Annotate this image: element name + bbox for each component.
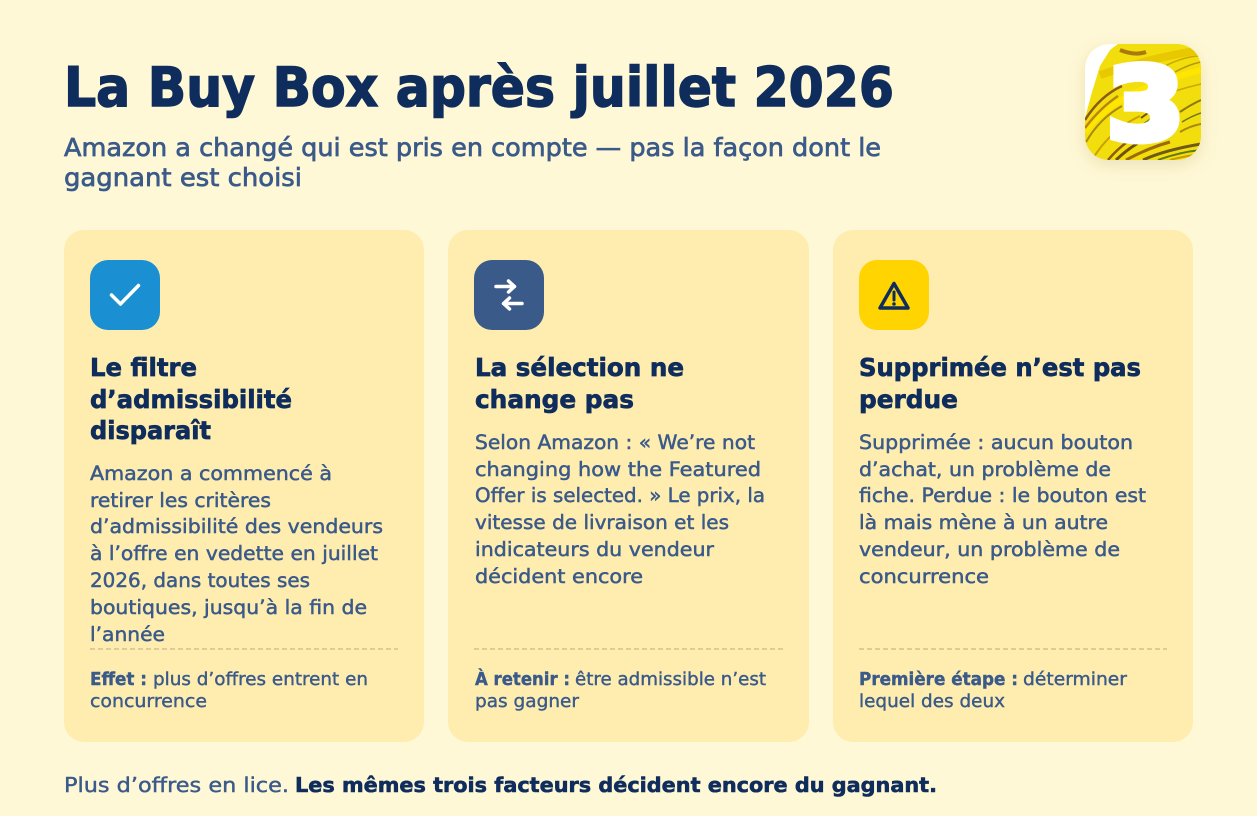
- body text: concurrence: [859, 565, 989, 588]
- footnote: lequel des deux: [859, 692, 1005, 712]
- body text: vendeur, un problème de: [859, 538, 1120, 561]
- body text: à l’offre en vedette en juillet: [90, 542, 378, 565]
- heading: [475, 353, 684, 414]
- body text: décident encore: [475, 565, 643, 588]
- body text: [90, 462, 383, 646]
- logo: yellow brush tile with white 3: [1085, 44, 1201, 163]
- heading: change pas: [475, 385, 634, 414]
- heading: [859, 353, 1141, 414]
- body text: d’achat, un problème de: [859, 458, 1111, 481]
- body text: l’année: [90, 623, 165, 646]
- footnote: À retenir :: [475, 668, 570, 690]
- subtitle: gagnant est choisi: [64, 163, 302, 192]
- icon: warning: [859, 260, 929, 330]
- icon: check: [90, 260, 160, 330]
- heading: Supprimée n’est pas: [859, 353, 1141, 382]
- body text: Selon Amazon : « We’re not: [475, 431, 755, 454]
- body text: [859, 431, 1146, 588]
- closing statement: Les mêmes trois facteurs décident encore du gagnant.: [295, 773, 937, 797]
- heading: [90, 353, 292, 445]
- panel: sélection: [448, 230, 809, 742]
- body text: Offer is selected. » Le prix, la: [475, 484, 765, 507]
- body text: vitesse de livraison et les: [475, 511, 729, 534]
- heading: d’admissibilité: [90, 385, 292, 414]
- body text: boutiques, jusqu’à la fin de: [90, 596, 367, 619]
- title: La Buy Box après juillet 2026: [64, 56, 894, 119]
- panel: filtre d'admissibilité: [64, 230, 424, 742]
- panel: supprimée vs perdue: [833, 230, 1193, 742]
- footnote: concurrence: [90, 692, 207, 712]
- body text: d’admissibilité des vendeurs: [90, 515, 383, 538]
- footnote: Effet :: [90, 670, 147, 690]
- closing statement: Plus d’offres en lice.: [64, 773, 289, 797]
- footnote: [475, 668, 766, 712]
- heading: perdue: [859, 385, 958, 414]
- footnote: pas gagner: [475, 692, 580, 712]
- heading: disparaît: [90, 416, 211, 445]
- logo numeral: 3: [1107, 46, 1184, 163]
- footnote: [859, 670, 1128, 712]
- body text: Supprimée : aucun bouton: [859, 431, 1133, 454]
- body text: là mais mène à un autre: [859, 511, 1108, 534]
- heading: Le filtre: [90, 353, 197, 382]
- body text: fiche. Perdue : le bouton est: [859, 484, 1146, 507]
- body text: Amazon a commencé à: [90, 462, 332, 485]
- footnote: plus d’offres entrent en: [153, 670, 368, 690]
- body text: indicateurs du vendeur: [475, 538, 715, 561]
- body text: [475, 431, 765, 588]
- body text: 2026, dans toutes ses: [90, 569, 310, 592]
- heading: La sélection ne: [475, 353, 684, 382]
- footnote: déterminer: [1023, 670, 1128, 690]
- subtitle: Amazon a changé qui est pris en compte — pas la façon dont le: [64, 133, 881, 162]
- footnote: Première étape :: [859, 670, 1018, 690]
- subtitle: [64, 133, 881, 192]
- footnote: [90, 670, 368, 712]
- body text: retirer les critères: [90, 489, 271, 512]
- body text: changing how the Featured: [475, 458, 761, 481]
- icon: swap arrows: [474, 260, 544, 330]
- footnote: être admissible n’est: [575, 670, 766, 690]
